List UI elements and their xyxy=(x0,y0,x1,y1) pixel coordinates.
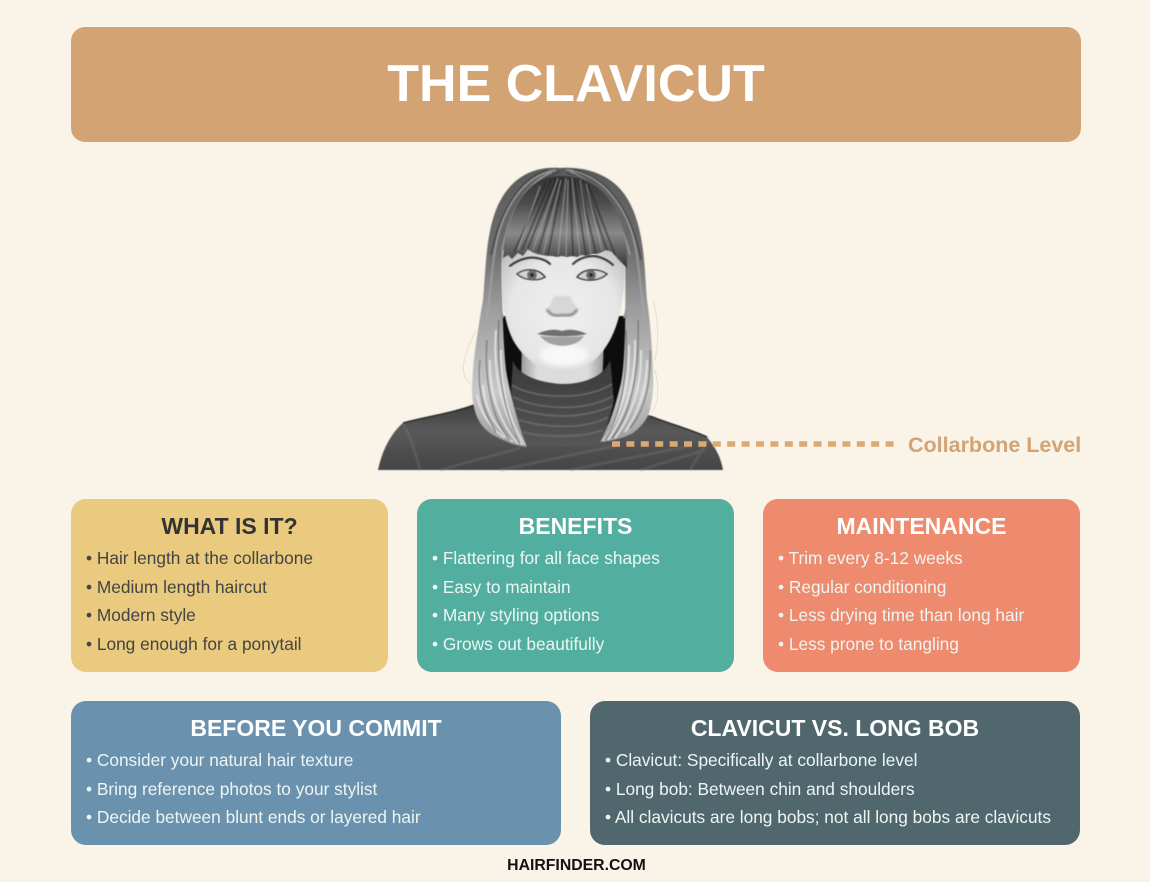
brows xyxy=(510,256,613,266)
list item: • Decide between blunt ends or layered hair xyxy=(86,807,421,827)
neck xyxy=(521,340,604,388)
list item: • Trim every 8-12 weeks xyxy=(778,548,963,568)
turtleneck xyxy=(511,360,614,446)
list item: • Modern style xyxy=(86,605,196,625)
panel: before you commit xyxy=(71,701,561,845)
list item: • Medium length haircut xyxy=(86,577,267,597)
heading: WHAT IS IT? xyxy=(161,513,298,539)
list item: • Hair length at the collarbone xyxy=(86,548,313,568)
list item: • Long bob: Between chin and shoulders xyxy=(605,779,915,799)
heading: BEFORE YOU COMMIT xyxy=(190,715,442,741)
list item: • Grows out beautifully xyxy=(432,634,604,654)
lips xyxy=(537,330,587,346)
collarbone label: Collarbone Level xyxy=(908,433,1081,457)
panel: clavicut vs long bob xyxy=(590,701,1080,845)
list item: • Less drying time than long hair xyxy=(778,605,1024,625)
list item: • Less prone to tangling xyxy=(778,634,959,654)
list item: • All clavicuts are long bobs; not all long bobs are clavicuts xyxy=(605,807,1051,827)
list item: • Bring reference photos to your stylist xyxy=(86,779,377,799)
list item: • Flattering for all face shapes xyxy=(432,548,660,568)
sweater xyxy=(378,405,723,470)
ears xyxy=(500,305,628,318)
list item: • Many styling options xyxy=(432,605,599,625)
face xyxy=(501,250,625,373)
list item: • Long enough for a ponytail xyxy=(86,634,302,654)
flyaway strands xyxy=(463,300,658,412)
list item: • Easy to maintain xyxy=(432,577,571,597)
list item: • Regular conditioning xyxy=(778,577,946,597)
panel: benefits xyxy=(417,499,734,672)
panel: maintenance xyxy=(763,499,1080,672)
panel: what is it xyxy=(71,499,388,672)
portrait illustration xyxy=(378,167,724,472)
title banner xyxy=(71,27,1081,142)
heading: CLAVICUT VS. LONG BOB xyxy=(691,715,979,741)
chin highlight xyxy=(540,344,588,366)
list item: • Clavicut: Specifically at collarbone level xyxy=(605,750,917,770)
bangs xyxy=(503,176,627,268)
hair xyxy=(472,168,653,447)
title: THE CLAVICUT xyxy=(387,55,765,113)
nose xyxy=(547,296,577,315)
collarbone dotted line xyxy=(612,441,894,447)
heading: BENEFITS xyxy=(519,513,632,539)
dark back hair xyxy=(500,316,628,425)
footer credit: HAIRFINDER.COM xyxy=(507,857,646,874)
eyes xyxy=(517,270,607,280)
heading: MAINTENANCE xyxy=(837,513,1006,539)
list item: • Consider your natural hair texture xyxy=(86,750,353,770)
